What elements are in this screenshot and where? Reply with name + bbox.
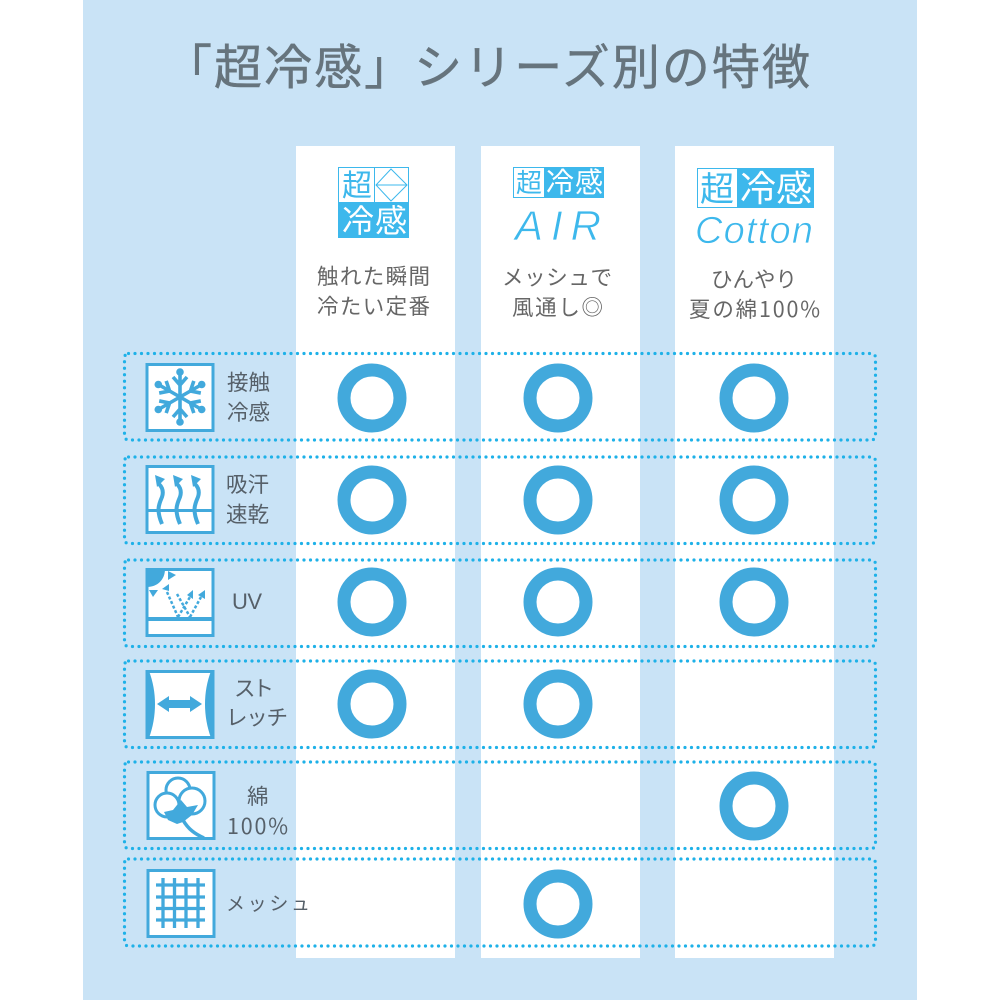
check: AIR	[530, 876, 586, 932]
logo: 超冷感 AIR: AIR	[512, 202, 601, 249]
check: AIR	[530, 574, 586, 630]
column: Cotton series	[675, 146, 834, 958]
title: 「超冷感」シリーズ別の特徴	[164, 28, 810, 98]
label: stretch: レッチ	[226, 701, 288, 732]
check: standard	[344, 472, 400, 528]
column: standard series	[296, 146, 455, 958]
check: standard	[344, 574, 400, 630]
tagline: standard	[317, 260, 430, 321]
label: stretch	[226, 672, 288, 732]
logo: 超冷感 Cotton: 超	[700, 162, 734, 211]
check: AIR	[530, 472, 586, 528]
row: mesh	[124, 859, 876, 946]
label: cold touch	[227, 366, 270, 427]
logo: 超冷感	[338, 161, 409, 242]
tagline: standard: 冷たい定番	[317, 290, 430, 321]
logo: 超冷感 Cotton: 冷感	[740, 160, 812, 212]
row: cotton	[124, 762, 876, 848]
check: Cotton	[726, 778, 782, 834]
label: cold touch: 接触	[227, 366, 270, 397]
label: cotton: 綿	[247, 780, 269, 811]
row: stretch	[124, 661, 876, 748]
row: cold touch	[124, 354, 876, 440]
check: Cotton	[726, 370, 782, 426]
tagline: AIR: メッシュで	[502, 261, 612, 292]
check: AIR	[530, 676, 586, 732]
tagline: Cotton	[689, 263, 820, 324]
logo: 超冷感: 冷感	[342, 196, 407, 242]
tagline: standard: 触れた瞬間	[317, 260, 430, 291]
label: sweat absorption: 速乾	[226, 498, 269, 529]
column: AIR series	[481, 146, 640, 958]
tagline: AIR	[502, 261, 612, 322]
tagline: Cotton: ひんやり	[711, 263, 797, 294]
logo: 超冷感 Cotton	[695, 160, 814, 252]
icon: mesh grid	[148, 870, 214, 936]
icon: stretch arrow	[147, 671, 213, 738]
check: AIR	[530, 370, 586, 426]
row: sweat absorption	[124, 457, 876, 544]
label: stretch: スト	[234, 672, 274, 703]
check: standard	[344, 370, 400, 426]
row: UV	[124, 560, 876, 646]
logo: 超冷感 AIR	[512, 161, 604, 249]
check: Cotton	[726, 574, 782, 630]
icon: snowflake	[147, 364, 213, 430]
label: cold touch: 冷感	[227, 396, 270, 427]
check: Cotton	[726, 472, 782, 528]
logo: 超冷感: 超	[342, 161, 372, 205]
label: sweat absorption: 吸汗	[226, 468, 269, 499]
logo: 超冷感 Cotton: Cotton	[695, 210, 813, 252]
label: cotton: 100%	[227, 810, 288, 841]
icon: cotton boll	[148, 772, 214, 838]
tagline: AIR: 風通し◎	[512, 291, 603, 322]
icon: wicking arrows	[147, 466, 213, 532]
logo: 超冷感 AIR: 冷感	[546, 161, 603, 201]
icon: sun and UV reflection	[147, 569, 213, 636]
label: UV: UV	[232, 589, 262, 614]
logo: 超冷感 AIR: 超	[516, 163, 542, 200]
label: mesh: メッシュ	[226, 889, 310, 916]
label: sweat absorption	[226, 468, 269, 529]
check: standard	[344, 676, 400, 732]
tagline: Cotton: 夏の綿100%	[689, 293, 820, 324]
label: cotton	[227, 780, 288, 841]
